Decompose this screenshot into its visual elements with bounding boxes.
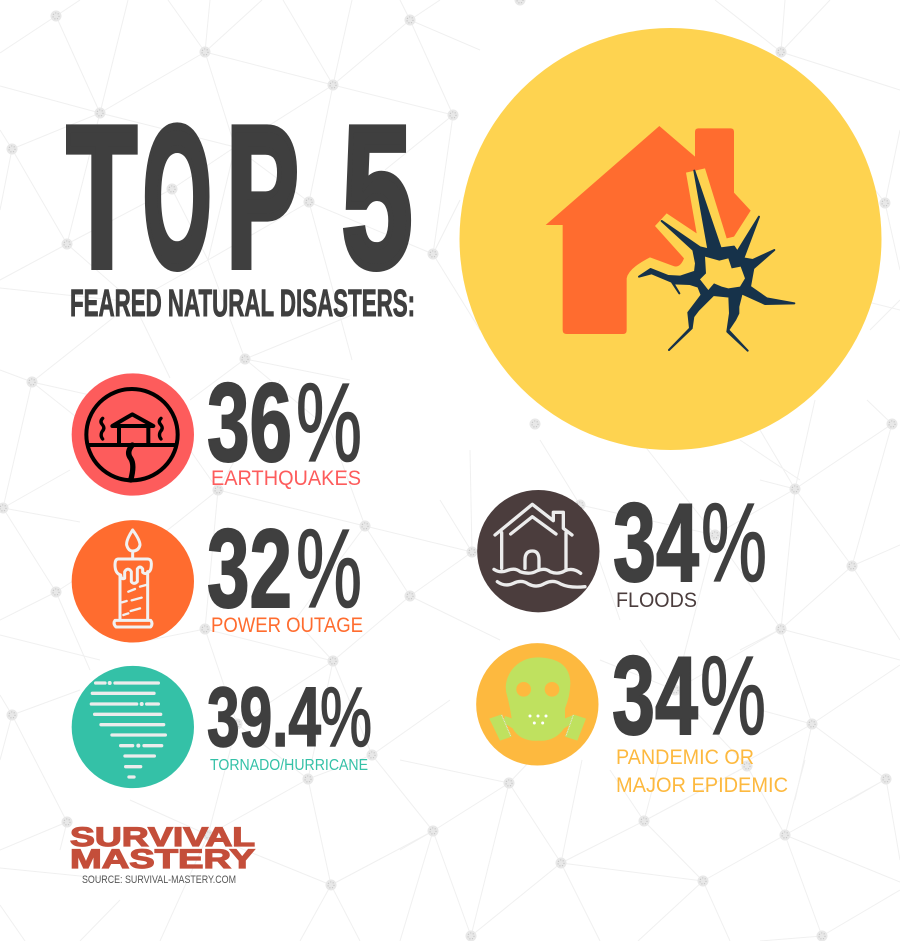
value: 32	[207, 507, 292, 631]
value: 39.4	[207, 670, 321, 764]
label: POWER OUTAGE	[211, 614, 363, 637]
big circle with cracked house illustration	[460, 28, 882, 450]
value: 34	[612, 634, 698, 758]
logo: Survival Mastery: MASTERY	[70, 844, 255, 874]
stat: floods	[477, 481, 767, 612]
stat: tornado / hurricane	[72, 666, 372, 788]
icon: earthquake house	[72, 373, 194, 496]
icon: tornado	[72, 666, 194, 788]
label: TORNADO/HURRICANE	[210, 757, 368, 774]
value: %	[320, 670, 372, 764]
label	[616, 746, 788, 797]
title: TOP 5: P	[226, 87, 299, 310]
icon: cracked house	[546, 126, 794, 351]
title: TOP 5: T	[67, 87, 137, 309]
source line: SOURCE: SURVIVAL-MASTERY.COM	[82, 874, 236, 886]
title: TOP 5: O	[143, 85, 211, 309]
value: %	[701, 481, 767, 605]
label: EARTHQUAKES	[211, 467, 361, 490]
icon: flooded house	[477, 490, 599, 612]
title: TOP 5	[67, 85, 412, 310]
label: PANDEMIC OR	[616, 746, 754, 769]
icon: candle	[72, 520, 194, 642]
subtitle: FEARED NATURAL DISASTERS:	[70, 283, 415, 325]
title: TOP 5: 5	[342, 87, 412, 309]
value: 36	[207, 361, 292, 485]
value: 34	[613, 481, 699, 605]
value: %	[296, 507, 362, 631]
value: %	[700, 634, 766, 758]
value: %	[296, 361, 362, 485]
stat: pandemic	[476, 634, 788, 797]
logo: Survival Mastery	[70, 822, 255, 874]
stat: earthquakes	[72, 361, 362, 496]
logo: Survival Mastery: SURVIVAL	[70, 822, 255, 852]
label: FLOODS	[616, 589, 697, 612]
icon: gas mask	[476, 643, 598, 765]
label: MAJOR EPIDEMIC	[616, 774, 788, 797]
stat: power outage	[72, 507, 363, 642]
